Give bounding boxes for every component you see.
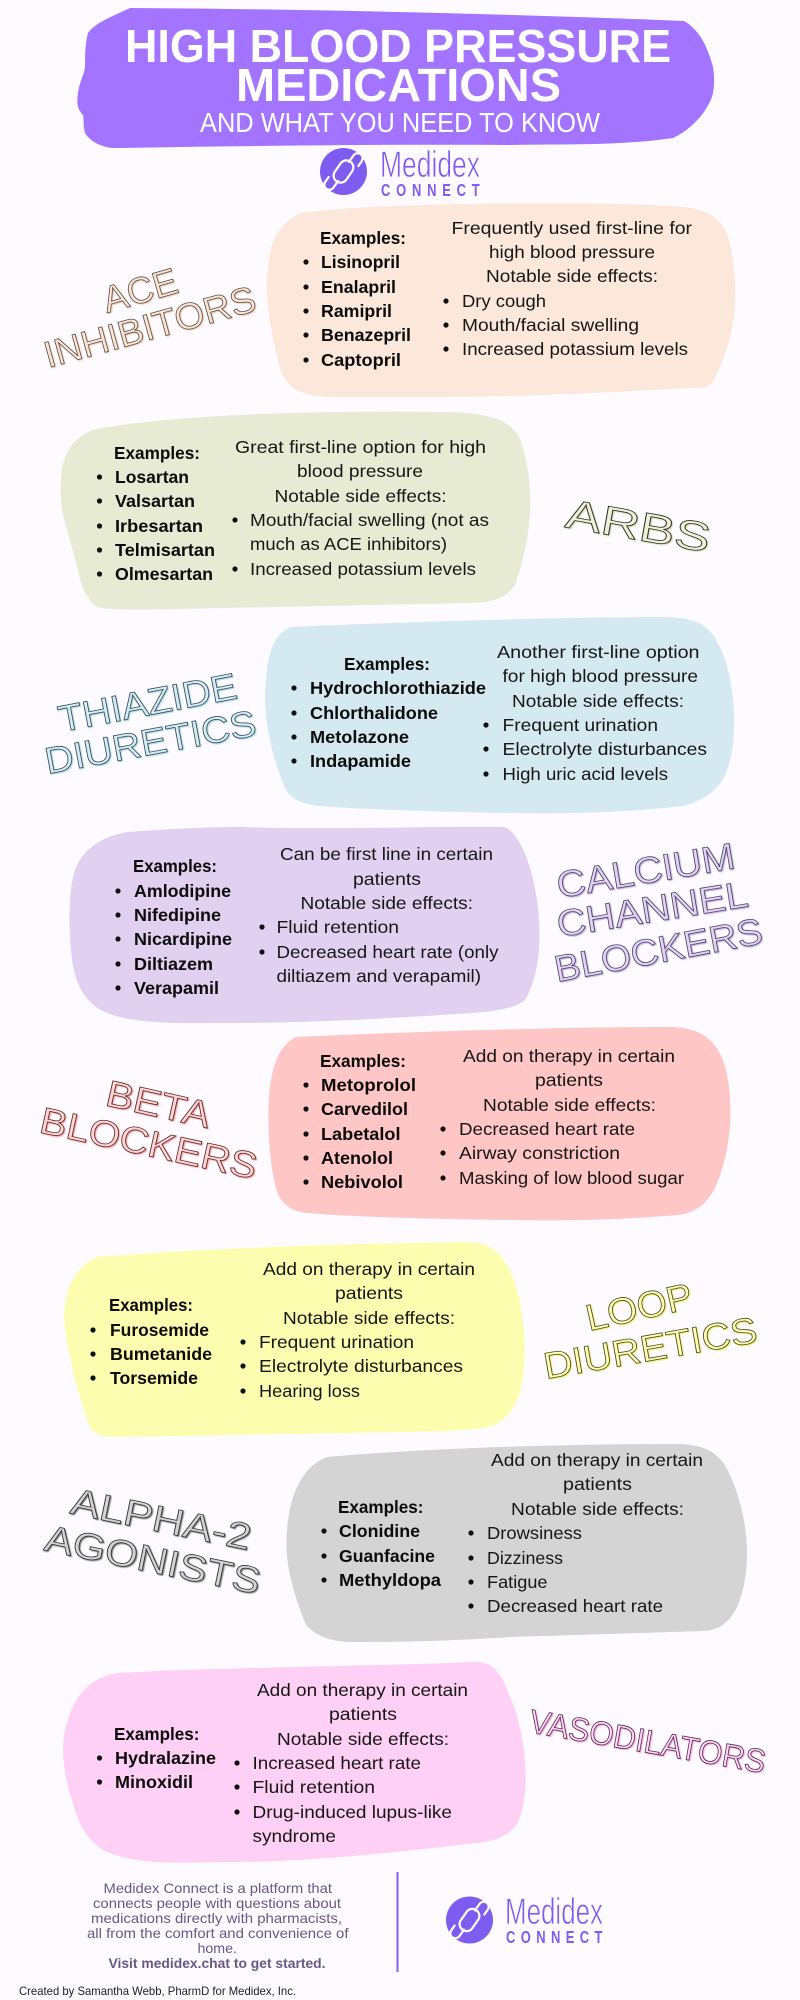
drug examples: Irbesartan	[115, 516, 203, 536]
description and side effects: Notable side effects:	[300, 893, 473, 913]
drug examples: Bumetanide	[110, 1344, 212, 1364]
drug examples: Labetalol	[321, 1124, 400, 1144]
heading: calcium channel blockers: BLOCKERS	[551, 910, 766, 990]
logo sub-wordmark: CONNECT	[506, 1928, 603, 1948]
drug examples: Benazepril	[321, 325, 411, 345]
description and side effects: Great first-line option for high	[235, 437, 486, 457]
description and side effects: Drug-induced lupus-like	[252, 1802, 452, 1822]
logo sub-wordmark: CONNECT	[381, 181, 480, 201]
drug examples: Nifedipine	[134, 905, 221, 925]
description and side effects: Notable side effects:	[483, 1095, 656, 1115]
drug examples: Valsartan	[115, 491, 195, 511]
drug examples: Lisinopril	[321, 252, 400, 272]
description and side effects: Frequent urination	[502, 715, 658, 735]
panel background	[60, 412, 530, 610]
description and side effects: Increased heart rate	[252, 1753, 421, 1773]
description and side effects: Masking of low blood sugar	[459, 1168, 684, 1188]
title background blob	[77, 8, 714, 148]
description and side effects: Add on therapy in certain	[463, 1046, 675, 1066]
description and side effects: Dry cough	[462, 291, 546, 311]
drug examples: Hydralazine	[115, 1748, 216, 1768]
panel background	[286, 1444, 747, 1642]
drug examples: Ramipril	[321, 301, 392, 321]
subtitle: AND WHAT YOU NEED TO KNOW	[200, 107, 601, 138]
heading: alpha-2 agonists	[41, 1481, 264, 1602]
heading: calcium channel blockers	[551, 835, 766, 990]
heading: ACE inhibitors: INHIBITORS	[39, 278, 260, 376]
drug examples: Metoprolol	[321, 1075, 416, 1095]
drug examples: Chlorthalidone	[310, 703, 438, 723]
description and side effects: Dizziness	[487, 1548, 563, 1568]
panel: thiazide diuretics	[41, 617, 734, 813]
description and side effects: patients	[335, 1283, 403, 1303]
drug examples: Atenolol	[321, 1148, 393, 1168]
panel: ACE inhibitors	[39, 203, 735, 397]
panel: loop diuretics	[64, 1242, 760, 1437]
panel background	[69, 827, 540, 1023]
description and side effects: Increased potassium levels	[462, 339, 688, 359]
description and side effects	[468, 1450, 703, 1616]
heading: alpha-2 agonists: AGONISTS	[41, 1518, 264, 1602]
panel: beta blockers	[36, 1027, 730, 1220]
description and side effects: Fluid retention	[252, 1777, 375, 1797]
drug examples	[303, 228, 411, 370]
drug examples: Minoxidil	[115, 1772, 193, 1792]
heading: beta blockers: BETA	[102, 1073, 215, 1136]
description and side effects: Decreased heart rate (only	[276, 942, 499, 962]
description and side effects: Notable side effects:	[511, 1499, 684, 1519]
drug examples	[90, 1295, 212, 1388]
description and side effects: Fatigue	[487, 1572, 548, 1592]
drug examples: Examples:	[114, 443, 200, 463]
panel background	[267, 203, 735, 397]
logo wordmark: Medidex	[380, 144, 480, 185]
drug examples: Methyldopa	[339, 1570, 441, 1590]
heading: loop diuretics: DIURETICS	[540, 1309, 760, 1387]
description and side effects: syndrome	[252, 1826, 336, 1846]
logo wordmark: Medidex	[505, 1891, 603, 1932]
drug examples: Enalapril	[321, 277, 396, 297]
drug examples	[97, 443, 215, 584]
drug examples: Nebivolol	[321, 1172, 403, 1192]
heading: beta blockers	[36, 1073, 261, 1187]
drug examples: Examples:	[320, 228, 406, 248]
description and side effects: patients	[535, 1070, 603, 1090]
description and side effects: Another first-line option	[497, 642, 700, 662]
description and side effects: patients	[563, 1474, 632, 1494]
description and side effects: patients	[353, 869, 421, 889]
description and side effects: Add on therapy in certain	[263, 1259, 475, 1279]
panel: alpha-2 agonists	[41, 1444, 747, 1642]
panel: calcium channel blockers	[69, 827, 766, 1023]
drug examples	[321, 1497, 441, 1590]
panel: ARBs	[60, 412, 714, 610]
description and side effects	[440, 1046, 684, 1188]
footer: about text: home.	[198, 1940, 237, 1956]
title line 2: MEDICATIONS	[236, 59, 561, 111]
drug examples: Verapamil	[134, 978, 219, 998]
drug examples: Diltiazem	[134, 954, 213, 974]
description and side effects: High uric acid levels	[502, 764, 668, 784]
drug examples: Examples:	[344, 654, 430, 674]
drug examples: Torsemide	[110, 1368, 198, 1388]
description and side effects: Increased potassium levels	[250, 559, 476, 579]
drug examples: Examples:	[133, 856, 217, 876]
logo: Medidex Connect top	[320, 144, 480, 201]
footer divider	[396, 1872, 398, 1972]
description and side effects: Mouth/facial swelling (not as	[250, 510, 489, 530]
heading: calcium channel blockers: CALCIUM	[553, 835, 738, 906]
description and side effects: Electrolyte disturbances	[259, 1356, 463, 1376]
drug examples: Indapamide	[310, 751, 411, 771]
footer: about text: all from the comfort and convenience of	[87, 1925, 349, 1941]
drug examples	[97, 1724, 216, 1792]
icon: chain link	[446, 1895, 493, 1945]
description and side effects: Notable side effects:	[486, 266, 658, 286]
panel background	[265, 617, 734, 813]
description and side effects: Fluid retention	[276, 917, 399, 937]
drug examples: Losartan	[115, 467, 189, 487]
heading: thiazide diuretics	[41, 666, 259, 782]
description and side effects: Notable side effects:	[512, 691, 684, 711]
description and side effects	[232, 437, 489, 579]
description and side effects	[259, 844, 499, 986]
heading: thiazide diuretics: THIAZIDE	[55, 666, 240, 740]
drug examples: Furosemide	[110, 1320, 209, 1340]
description and side effects: Frequently used first-line for	[452, 218, 692, 238]
description and side effects: Add on therapy in certain	[257, 1680, 468, 1700]
description and side effects: diltiazem and verapamil)	[276, 966, 481, 986]
heading: loop diuretics: LOOP	[582, 1275, 696, 1339]
header: title banner	[77, 8, 714, 148]
description and side effects	[234, 1680, 468, 1846]
title line 1: HIGH BLOOD PRESSURE	[125, 20, 671, 72]
description and side effects: Add on therapy in certain	[491, 1450, 703, 1470]
description and side effects: for high blood pressure	[502, 666, 698, 686]
logo: Medidex Connect footer	[446, 1891, 603, 1948]
heading: alpha-2 agonists: ALPHA-2	[67, 1481, 255, 1558]
description and side effects: high blood pressure	[489, 242, 655, 262]
footer: about text: connects people with questions about	[93, 1895, 341, 1911]
description and side effects: Can be first line in certain	[280, 844, 493, 864]
drug examples	[115, 856, 232, 998]
description and side effects: patients	[329, 1704, 397, 1724]
drug examples: Examples:	[114, 1724, 200, 1744]
description and side effects: Hearing loss	[259, 1381, 360, 1401]
drug examples: Captopril	[321, 350, 401, 370]
description and side effects: blood pressure	[297, 461, 423, 481]
description and side effects: much as ACE inhibitors)	[250, 534, 447, 554]
drug examples: Examples:	[320, 1051, 406, 1071]
heading: ACE inhibitors: ACE	[98, 260, 182, 321]
heading: calcium channel blockers: CHANNEL	[554, 874, 751, 945]
description and side effects: Decreased heart rate	[487, 1596, 663, 1616]
drug examples: Clonidine	[339, 1521, 420, 1541]
panel background	[268, 1027, 730, 1220]
description and side effects: Frequent urination	[259, 1332, 414, 1352]
description and side effects: Notable side effects:	[274, 486, 446, 506]
heading: thiazide diuretics: DIURETICS	[41, 703, 259, 782]
description and side effects: Airway constriction	[459, 1143, 620, 1163]
heading: beta blockers: BLOCKERS	[36, 1100, 261, 1187]
description and side effects: Notable side effects:	[283, 1308, 455, 1328]
drug examples: Carvedilol	[321, 1099, 408, 1119]
description and side effects	[483, 642, 707, 784]
heading: ARBs: ARBS	[562, 491, 714, 561]
drug examples: Nicardipine	[134, 929, 232, 949]
description and side effects: Mouth/facial swelling	[462, 315, 639, 335]
description and side effects: Decreased heart rate	[459, 1119, 635, 1139]
description and side effects: Notable side effects:	[277, 1729, 449, 1749]
drug examples: Examples:	[109, 1295, 193, 1315]
drug examples: Telmisartan	[115, 540, 215, 560]
drug examples: Amlodipine	[134, 881, 231, 901]
panel background	[63, 1662, 526, 1863]
footer: about text: medications directly with pharmacists,	[91, 1910, 342, 1926]
description and side effects: Electrolyte disturbances	[502, 739, 707, 759]
heading: vasodilators: VASODILATORS	[527, 1702, 769, 1780]
drug examples: Guanfacine	[339, 1546, 435, 1566]
footer: about text: Visit medidex.chat to get started.	[108, 1955, 326, 1971]
panel background	[64, 1242, 525, 1437]
drug examples	[291, 654, 486, 771]
icon: chain link	[320, 147, 367, 196]
drug examples: Hydrochlorothiazide	[310, 678, 486, 698]
footer: about text	[87, 1880, 349, 1971]
heading: loop diuretics	[540, 1275, 760, 1387]
drug examples	[303, 1051, 416, 1192]
description and side effects	[240, 1259, 475, 1401]
credit line: Created by Samantha Webb, PharmD for Medidex, Inc.	[19, 1984, 296, 1998]
description and side effects	[443, 218, 692, 359]
drug examples: Olmesartan	[115, 564, 213, 584]
panel: vasodilators	[63, 1662, 769, 1863]
drug examples: Metolazone	[310, 727, 409, 747]
footer: about text: Medidex Connect is a platform that	[104, 1880, 332, 1896]
description and side effects: Drowsiness	[487, 1523, 582, 1543]
drug examples: Examples:	[338, 1497, 424, 1517]
